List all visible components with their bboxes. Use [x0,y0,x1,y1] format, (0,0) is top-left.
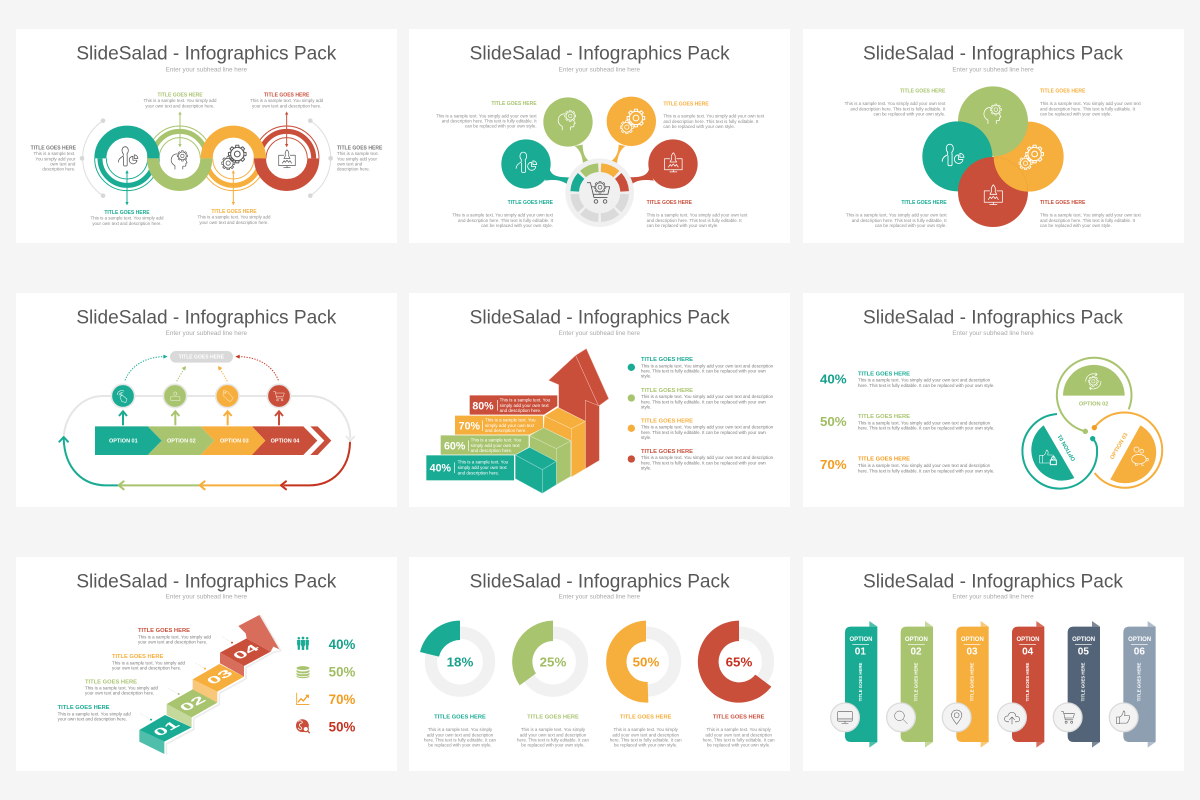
text: orange: can be replaced with your own style. [1040,111,1112,116]
text: teal: This is a sample text. You simply add your own text [846,213,947,218]
row: 40%: 40% [820,372,847,386]
text: orange: and description here. This text is fully editable. It [1040,106,1136,111]
40% label: 40% [430,462,452,474]
text: green [845,88,946,116]
text: orange [197,209,271,225]
text: red: can be replaced with your own style. [1040,223,1112,228]
text: red: TITLE GOES HERE [264,92,310,98]
text: teal: This is a sample text. You simply [428,727,493,732]
stats: 50% [329,719,356,735]
donut: 18%: 18% [447,655,473,670]
text: green [517,714,589,747]
text: grey right [337,146,383,172]
text: orange [112,654,186,670]
grey side arcs [80,118,333,198]
icon: cart with gear [587,181,610,203]
icon: globe [296,719,310,733]
text: green: This is a sample text. You simply add [143,98,217,103]
text: teal: and description here. This text is fully editable. It [458,218,554,223]
row: 40% [820,371,995,388]
ribbon 01: 01 [855,647,866,658]
donut: 65%: 65% [726,655,752,670]
text: grey right: own text and [337,162,363,167]
text: orange [610,714,682,747]
ribbon 04: OPTION [1017,637,1039,643]
text: green: This is a sample text. You simply add [85,686,159,691]
subhead: Enter your subhead line here [952,595,1034,601]
legend: orange: This is a sample text. You simply add your own text and description [641,425,774,430]
ring: option 02: OPTION 02 [1079,401,1108,407]
bubble tails [545,145,654,184]
subhead: Enter your subhead line here [166,331,248,337]
row: 40%: This is a sample text. You simply add your own text and description [858,378,991,383]
step 04: 04 [229,642,263,662]
legend: orange [628,418,774,440]
70% label: This is a sample text. You [485,418,536,423]
text: orange: TITLE GOES HERE [1040,88,1086,94]
text: teal [452,200,554,228]
text: grey right: description here. [337,167,370,172]
text: green: This is a sample text. You simply add your own text [436,113,537,118]
text: red: This is a sample text. You simply add [250,98,324,103]
text: orange: add your own text and description [612,732,679,737]
icon: touch [117,391,127,402]
text: teal: your own text and description here. [92,221,162,226]
text: teal [90,210,164,226]
text: red [647,200,748,228]
text: grey left: TITLE GOES HERE [31,146,76,152]
text: orange: here. This text is fully editable. It can [610,737,682,742]
text: orange: This is a sample text. You simply add [197,215,271,220]
title: SlideSalad - Infographics Pack [863,307,1123,328]
row: 70%: TITLE GOES HERE [858,456,910,462]
70% label [459,418,536,433]
donut: 18% [420,621,489,691]
text: orange: This is a sample text. You simply [613,727,679,732]
text: grey right: TITLE GOES HERE [337,146,383,152]
ribbon 01: TITLE GOES HERE [858,663,863,701]
ribbon 02: 02 [910,647,922,658]
icon: person with chart [942,144,964,166]
panel: donut charts [409,557,790,771]
text: red: TITLE GOES HERE [138,628,190,634]
subhead: Enter your subhead line here [559,331,641,337]
text: grey right: This is a sample text. [337,151,379,156]
icon: tag [223,391,233,402]
subhead: Enter your subhead line here [559,67,641,73]
stats: 70% [329,691,356,707]
text: red: and description here. This text is fully editable. It [1040,218,1136,223]
ring: option 03 [1092,412,1162,488]
title: SlideSalad - Infographics Pack [76,307,337,328]
80% label: 80% [472,400,494,412]
text: green: can be replaced with your own style. [874,111,945,116]
text: green: add your own text and description [520,732,587,737]
60% label: 60% [444,441,466,453]
ribbon 05 [1053,621,1100,748]
text: green: your own text and description here. [85,691,154,696]
ribbon 03 [942,621,989,748]
stats: 50% [329,663,356,679]
icon: thumb with lock [1040,450,1056,465]
subhead: Enter your subhead line here [952,331,1034,337]
title: SlideSalad - Infographics Pack [76,571,337,592]
icon: head with gear [558,110,576,130]
legend: orange: here. This text is fully editable. It can be replaced with your own [641,430,766,435]
bubbles [501,97,698,189]
icon: rocket monitor [279,150,295,168]
icon: cart [273,391,284,401]
row: 40%: TITLE GOES HERE [858,371,910,377]
text: red: TITLE GOES HERE [713,714,765,720]
80% label [472,398,551,413]
text: grey left [31,146,76,172]
70% label: simply add your own text [485,423,535,428]
text: green: This is a sample text. You simply add your own text [845,101,946,106]
icon: people [297,637,309,650]
text: green: and description here. This text is fully editable. It [850,106,946,111]
legend: red: style. [641,465,651,470]
option labels: OPTION 04 [271,438,300,444]
text: orange: your own text and description here. [112,665,181,670]
panel: option ribbons [803,557,1184,771]
subhead: Enter your subhead line here [166,67,248,73]
ribbon 04: 04 [1022,647,1034,658]
ribbon 02: TITLE GOES HERE [914,663,919,701]
option labels: OPTION 03 [220,438,249,444]
70% label: and description here. [485,428,527,433]
donut: 25%: 25% [540,655,566,670]
subhead: Enter your subhead line here [559,595,641,601]
text: green: here. This text is fully editable. It can [517,737,589,742]
text: teal: TITLE GOES HERE [104,210,150,216]
ribbon 04: TITLE GOES HERE [1025,663,1030,701]
panel: hub with bubbles [409,29,790,243]
ring: option 01 [1022,414,1097,489]
icon: person with chart [118,147,138,166]
60% label: and description here. [471,448,512,453]
legend: red: here. This text is fully editable. It can be replaced with your own [641,460,766,465]
text: red: This is a sample text. You simply [706,727,772,732]
donut: 65% [698,621,771,703]
row: 40%: here. This text is fully editable. It can be replaced with your own style. [858,383,995,388]
leaders [140,637,232,720]
row: 50% [820,414,995,431]
legend: red: This is a sample text. You simply add your own text and description [641,455,774,460]
red arrow [549,349,609,469]
text: teal: TITLE GOES HERE [508,200,553,206]
text: red: This is a sample text. You simply add your own text [1040,213,1141,218]
legend: green: style. [641,404,651,409]
step 03 [193,664,244,703]
legend: teal: TITLE GOES HERE [641,357,693,363]
text: teal [58,705,131,722]
title: SlideSalad - Infographics Pack [470,307,730,328]
text: green: TITLE GOES HERE [157,92,203,98]
ribbon 06: 06 [1134,647,1145,658]
green step [530,428,571,485]
ring centres [107,138,307,178]
text: grey left: This is a sample text. [34,151,75,156]
text: orange: your own text and description here. [199,220,269,225]
text: orange: and description here. This text is fully editable. It [663,119,759,124]
ribbon 01 [831,621,877,748]
text: red: can be replaced with your own style. [647,223,718,228]
ring: option 01: OPTION 01 [1057,433,1077,462]
text: orange: be replaced with your own style. [614,742,677,747]
text: grey left: You simply add your [35,156,76,161]
legend: teal [628,357,774,379]
thin concentric half rings [95,126,319,191]
text: orange: can be replaced with your own style. [663,124,735,129]
nodes [111,384,291,408]
text: red: and description here. This text is fully editable. It [647,218,742,223]
text: green: and description here. This text is fully editable. It [442,119,537,124]
step arrow head [238,615,279,652]
text: orange: TITLE GOES HERE [211,209,257,215]
ribbon 04 [998,621,1044,748]
icon: rocket monitor [984,185,1002,205]
icon: gears [222,145,246,170]
text: teal: This is a sample text. You simply add your own text [452,213,554,218]
text: orange: This is a sample text. You simply add [112,660,186,665]
text: green [143,92,217,108]
stats [329,636,356,735]
ribbon 03: OPTION [961,637,984,643]
icon: gears [620,109,645,134]
title: SlideSalad - Infographics Pack [470,43,730,64]
ribbon 06: TITLE GOES HERE [1137,663,1142,701]
text: teal [424,714,496,747]
40% label: This is a sample text. You [458,460,509,465]
option labels: OPTION 01 [109,438,138,444]
grey loop [64,396,355,441]
text: red: your own text and description here. [138,639,207,644]
icon: cycle gear [1086,373,1101,390]
text: red: TITLE GOES HERE [647,200,692,206]
title: SlideSalad - Infographics Pack [470,571,730,592]
row: 70%: here. This text is fully editable. It can be replaced with your own style. [858,468,995,473]
legend: green: This is a sample text. You simply add your own text and description [641,394,774,399]
row: 70%: This is a sample text. You simply add your own text and description [858,463,991,468]
text: green: TITLE GOES HERE [85,679,137,685]
text: green: This is a sample text. You simply [521,727,586,732]
60% label: This is a sample text. You [471,438,522,443]
ring: option 02 [1057,358,1131,434]
text: teal: TITLE GOES HERE [901,200,947,206]
text: red: here. This text is fully editable. It can [703,737,775,742]
text: teal: This is a sample text. You simply add [58,711,131,716]
40% label: simply add your own text [458,465,507,470]
leader dots [150,642,233,721]
legend: teal: This is a sample text. You simply add your own text and description [641,363,774,368]
60% label [444,438,522,453]
text: green: be replaced with your own style. [521,742,585,747]
row: 70% [820,456,995,473]
icon: person with chart [516,152,537,173]
text: green: TITLE GOES HERE [527,714,579,720]
donut: 50% [606,621,675,703]
title: SlideSalad - Infographics Pack [863,43,1123,64]
coloured return loop [59,437,350,489]
text: teal: here. This text is fully editable. It can [424,737,496,742]
stem arrows [119,411,283,425]
ribbon 02: OPTION [905,637,928,643]
80% label: and description here. [500,408,541,413]
ring: option 03: OPTION 03 [1110,432,1130,461]
text: orange: TITLE GOES HERE [112,654,164,660]
text: red: TITLE GOES HERE [1040,200,1086,206]
text: teal: TITLE GOES HERE [58,705,110,711]
text: green: TITLE GOES HERE [491,101,537,107]
ribbon 03: 03 [966,647,978,658]
overlapping circles [922,86,1064,227]
text: red [703,714,775,747]
step 01 [139,715,192,754]
legend: orange: style. [641,435,651,440]
80% label: This is a sample text. You [500,398,551,403]
icon: head with gear [171,151,188,169]
ribbon 06: OPTION [1128,637,1151,643]
arrows [125,111,288,205]
donut: 50%: 50% [633,655,659,670]
panel: stair arrow [409,293,790,507]
text: green [85,679,159,696]
label bars [426,395,557,480]
70% label: 70% [459,421,481,433]
text: teal: can be replaced with your own style. [481,223,553,228]
stats: 40% [329,636,356,652]
text: orange: TITLE GOES HERE [620,714,672,720]
icon: user [171,392,180,401]
legend: green [628,388,774,409]
donut: 25% [512,621,582,691]
option arrows [95,426,331,455]
legend: green: here. This text is fully editable. It can be replaced with your own [641,399,766,404]
ribbon 02 [887,621,933,748]
text: teal: can be replaced with your own style. [875,223,947,228]
step 01: 01 [150,719,183,738]
option labels [109,438,300,444]
icon: piggy bank [1132,447,1148,465]
text: orange [663,101,765,129]
80% label: simply add your own text [500,403,549,408]
step 04 [220,638,271,677]
text: grey right: You simply add your [337,156,377,161]
row: 70%: 70% [820,458,847,472]
text: green: can be replaced with your own style. [465,124,537,129]
legend: green: TITLE GOES HERE [641,388,693,394]
40% label [430,460,509,475]
icon: head with gear [984,104,1001,124]
text: red: be replaced with your own style. [707,742,770,747]
subhead: Enter your subhead line here [166,595,248,601]
thick half rings [100,132,313,185]
title pill: TITLE GOES HERE [179,355,224,361]
row: 50%: TITLE GOES HERE [858,414,910,420]
panel: isometric steps [16,557,397,771]
text: teal: and description here. This text is fully editable. It [852,218,947,223]
text: red: This is a sample text. You simply add your own text [647,213,748,218]
ribbon 05: TITLE GOES HERE [1081,663,1086,701]
step 03: 03 [203,667,236,687]
icon: gears [1019,145,1043,170]
text: green [436,101,537,129]
text: teal: be replaced with your own style. [428,742,492,747]
text: grey left: description here. [42,167,75,172]
60% label: simply add your own text [471,443,520,448]
subhead: Enter your subhead line here [952,67,1034,73]
row: 50%: This is a sample text. You simply add your own text and description [858,420,991,425]
title: SlideSalad - Infographics Pack [76,43,337,64]
orange step [544,408,585,477]
step 02: 02 [176,694,209,713]
ribbon 06 [1109,621,1156,748]
ribbon 01: OPTION [850,637,872,643]
hub [564,157,635,228]
row: 50%: here. This text is fully editable. It can be replaced with your own style. [858,426,995,431]
legend: orange: TITLE GOES HERE [641,418,693,424]
text: orange [1040,88,1141,116]
ribbon 05: OPTION [1072,637,1095,643]
text: orange: This is a sample text. You simply add your own text [1040,101,1141,106]
text: teal: your own text and description here. [58,717,127,722]
icon: chart [297,693,309,705]
40% label: and description here. [458,470,499,475]
text: teal: add your own text and description [427,732,494,737]
legend: teal: here. This text is fully editable. It can be replaced with your own [641,369,766,374]
panel: three option rings [803,293,1184,507]
ribbon 05: 05 [1078,647,1089,658]
dotted arrows [125,355,278,381]
text: red: your own text and description here. [252,103,321,108]
text: green: TITLE GOES HERE [900,88,946,94]
text: orange: TITLE GOES HERE [663,101,709,107]
text: teal: This is a sample text. You simply add [90,216,164,221]
text: red: This is a sample text. You simply add [138,634,212,639]
text: red [250,92,324,108]
text: red [1040,200,1141,228]
ribbon 03: TITLE GOES HERE [969,663,974,701]
row: 50%: 50% [820,415,847,429]
teal step [515,447,556,493]
panel: linked rings [16,29,397,243]
text: red: add your own text and description [705,732,772,737]
text: red [138,628,212,644]
step 02 [167,689,217,727]
legend: teal: style. [641,374,651,379]
text: teal [846,200,947,228]
text: orange: This is a sample text. You simply add your own text [663,114,765,119]
title: SlideSalad - Infographics Pack [863,571,1123,592]
text: teal: TITLE GOES HERE [434,714,486,720]
option labels: OPTION 02 [167,438,196,444]
panel: process loop [16,293,397,507]
legend: red [628,449,774,470]
icon: coins [297,666,309,678]
title pill [170,351,233,363]
text: green: your own text and description here. [145,103,215,108]
legend: red: TITLE GOES HERE [641,449,693,455]
stair shadow [166,615,281,755]
panel: pinwheel circles [803,29,1184,243]
icon: rocket monitor [665,153,682,172]
text: grey left: own text and [50,162,76,167]
